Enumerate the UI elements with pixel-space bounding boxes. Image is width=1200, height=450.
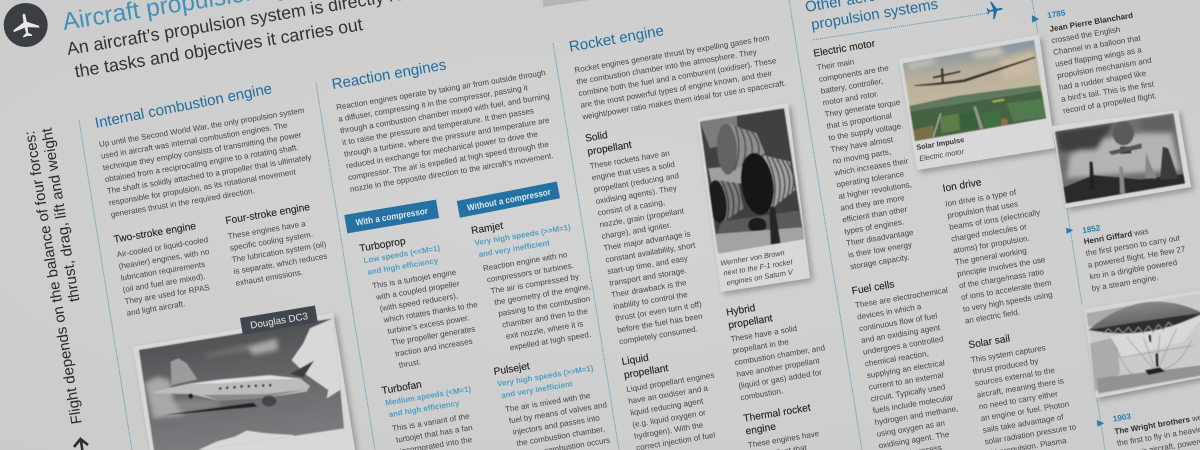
block: fuel cells: undergoes a controlled <box>862 334 944 357</box>
block: electric motor: Electric motor <box>813 38 877 60</box>
block: electric motor: that is proportional <box>826 111 893 131</box>
block: fuel cells: using oxygen as an <box>876 418 945 439</box>
caption: Solar Impulse, electric motor: Electric motor <box>918 147 965 163</box>
text: internal combustion intro: used in aircraft was internal combustion engines. The <box>100 121 289 161</box>
entry: 1785 Jean Pierre Blanchard: had a rudder shaped like <box>1058 69 1147 92</box>
subheading: four-stroke engine: Four-stroke engine <box>225 202 311 227</box>
block: turbofan: Medium speeds (<M=1) <box>385 384 472 408</box>
block: liquid propellant: liquid reducing agent <box>630 396 705 418</box>
button: without a compressor: Without a compressor <box>466 187 552 213</box>
block: turboprop: with a coupled propeller <box>374 279 460 302</box>
block: hybrid propellant: combustion. <box>740 386 784 402</box>
block: liquid propellant: have an oxidiser and a <box>628 384 709 406</box>
block: electric motor: operating tolerance <box>836 169 905 189</box>
block: hybrid propellant: These have a solid <box>730 324 798 344</box>
block: electric motor: They generate torque <box>824 98 901 119</box>
block: electric motor: Their main <box>816 57 855 72</box>
block: solid propellant: completely consumed. <box>618 324 698 346</box>
block: thermal rocket engine: engine <box>745 422 777 437</box>
block: ion drive: of the charge/mass ratio <box>958 267 1045 290</box>
icon: up arrow <box>74 439 88 450</box>
block: solar sail: solar radiation pressure to <box>984 422 1077 447</box>
vertical side text: four forces: thrust, drag, lift and weight <box>38 126 83 303</box>
text: internal combustion intro: Up until the Second World War, the only propulsion system <box>98 106 305 149</box>
text: four-stroke: is separate, which reduces <box>233 252 328 276</box>
text: two-stroke: (oil and fuel are mixed). <box>122 272 206 294</box>
block: hybrid propellant: have another propellant <box>736 356 821 379</box>
label: Douglas DC3 <box>240 305 318 335</box>
block: fuel cells: supplying an electrical <box>866 358 946 380</box>
block: solar sail: Solar sail <box>968 333 1011 351</box>
entry: 1785 Jean Pierre Blanchard: Channel in a balloon that <box>1053 33 1142 57</box>
block: ramjet: Ramjet <box>470 221 504 237</box>
block: ramjet: compressors or turbines. <box>486 261 574 284</box>
block: hybrid propellant <box>725 293 832 402</box>
block: ramjet: Very high speeds (>>M=1) <box>474 223 572 248</box>
text: rocket engine intro: combine both the fuel and a comburent (oxidiser). These <box>578 56 777 98</box>
block: liquid propellant: Liquid propellant engines <box>626 371 715 394</box>
block: solid propellant <box>584 119 710 346</box>
block: ion drive: an electric field. <box>964 307 1021 326</box>
block: hybrid propellant: combustion chamber, and <box>734 343 826 367</box>
block: solar sail: sails take advantage of <box>982 412 1065 435</box>
block: electric motor: battery, controller, <box>820 76 884 96</box>
block: ramjet <box>470 208 599 355</box>
block: ion drive: principle involves the use <box>956 255 1047 279</box>
block: ramjet: expelled at high speed. <box>509 330 592 352</box>
block: turboprop: thrust. <box>398 357 422 370</box>
block: electric motor: Their disadvantage <box>846 228 915 248</box>
block: turboprop: and high efficiency <box>367 256 439 277</box>
block: thermal rocket engine <box>743 402 822 450</box>
block: ion drive: to very high speeds using <box>962 290 1053 314</box>
block: ion drive: beams of ions (electrically <box>949 208 1041 232</box>
block: solid propellant: thrust (or even turn it off) <box>615 300 703 323</box>
text: reaction engines intro <box>336 68 560 194</box>
block: pulsejet: The air is mixed with the <box>504 391 592 414</box>
vertical side text: four forces: Flight depends on the balance of four forces: <box>21 130 86 425</box>
text: two-stroke: (heavier) engines, with no <box>118 247 210 271</box>
block: fuel cells: oxidising agent. The <box>878 430 950 450</box>
block: ramjet: the geometry of the engine, <box>494 282 591 307</box>
panel: timeline <box>1032 8 1200 450</box>
caption: Wernher von Brown: engines on Saturn V <box>726 267 794 287</box>
block: ion drive: of ions to accelerate them <box>960 278 1052 302</box>
entry: 1852 Henri Giffard: the first person to carry out <box>1085 233 1181 258</box>
text: rocket engine intro: the combustion chamber into the atmosphere. They <box>576 47 757 86</box>
block: pulsejet: the combustion chamber, <box>516 424 606 448</box>
block: pulsejet <box>493 350 613 450</box>
block: hybrid propellant: propellant in the <box>732 337 790 356</box>
text: reaction engines intro: Reaction engines operate by taking air from outside through <box>336 68 546 112</box>
block: turboprop: turbine’s excess power. <box>387 313 470 336</box>
text: reaction engines intro: nozzle in the opposite direction to the aircraft’s movement. <box>349 151 554 194</box>
heading: reaction engines: Reaction engines <box>330 56 448 93</box>
entry: 1903 Wright brothers <box>1097 411 1200 450</box>
entry: 1852 Henri Giffard: Henri Giffard was <box>1083 227 1149 246</box>
entry: 1785 Jean Pierre Blanchard: 1785 <box>1047 8 1066 20</box>
panel: reaction engines <box>330 56 613 450</box>
text: two-stroke: Air-cooled or liquid-cooled <box>116 235 209 259</box>
block: fuel cells: and an oxidising agent <box>860 323 942 345</box>
block: solid propellant: inability to control the <box>613 290 689 311</box>
block: solid propellant: Solid <box>584 130 609 145</box>
block: electric motor: They have almost <box>830 135 894 154</box>
heading: internal combustion engine: Internal combustion engine <box>93 80 273 132</box>
text: reaction engines intro: compressor. The air is expelled at high speed through the <box>347 140 550 182</box>
block: turbofan: Turbofan <box>381 379 423 397</box>
entry: 1785 Jean Pierre Blanchard: used flapping wings as a <box>1054 45 1143 69</box>
button: with a compressor: With a compressor <box>355 206 429 228</box>
text: four-stroke: The lubrication system (oil) <box>231 240 327 264</box>
text: rocket engine intro: are the most powerful types of engine known, and their <box>580 69 773 110</box>
subheading: two-stroke engine: Two-stroke engine <box>113 221 197 246</box>
block: ion drive: charged molecules or <box>950 222 1028 244</box>
block: electric motor: storage capacity. <box>849 253 910 271</box>
entry: 1785 Jean Pierre Blanchard: Jean Pierre Blanchard <box>1049 11 1134 34</box>
block: turbofan: This is a variant of the <box>391 411 471 433</box>
block: hybrid propellant: propellant <box>728 313 774 331</box>
block: electric motor: motor and rotor. <box>822 89 879 107</box>
text: two-stroke: and light aircraft. <box>126 299 186 318</box>
block: ramjet: The air is compressed by <box>490 272 580 296</box>
entry: 1852 Henri Giffard <box>1066 221 1190 293</box>
icon: blue plane <box>985 0 1004 20</box>
block: solar sail: thrust produced by <box>972 356 1039 376</box>
block: fuel cells: fuels include molecular <box>872 393 954 415</box>
label: Douglas DC3: Douglas DC3 <box>250 311 309 332</box>
block: ion drive: The general working <box>954 246 1027 267</box>
block: ramjet: Reaction engine with no <box>482 250 569 273</box>
block: solid propellant: propellant <box>587 140 633 158</box>
text: two-stroke: lubrication requirements <box>120 260 206 283</box>
text: reaction engines intro: reduced in exchange for mechanical power to drive the <box>345 129 539 171</box>
text: reaction engines intro: through a combustion chamber mixed with fuel, and burning <box>339 91 550 135</box>
button: without a compressor <box>457 182 560 218</box>
block: fuel cells: continuous flow of fuel <box>858 311 938 333</box>
text: reaction engines intro: a diffuser, compressing it in the compressor, passing it <box>338 83 529 124</box>
block: pulsejet: fuel by means of valves and <box>508 400 608 425</box>
text: rocket engine intro <box>573 32 787 122</box>
block: solar sail: an engine or fuel. Photon <box>980 399 1070 423</box>
block: pulsejet: Pulsejet <box>493 361 531 378</box>
subtitle: the tasks and objectives it carries out <box>73 14 364 81</box>
block: turbofan: turbojet that has a fan <box>395 423 473 445</box>
button: with a compressor <box>344 200 439 233</box>
photo card: Douglas DC3 <box>120 300 360 450</box>
icon: plane in dark circle <box>4 3 48 47</box>
entry: 1852 Henri Giffard: 1852 <box>1082 223 1101 235</box>
entry: 1852 Henri Giffard: km in a dirigible powered <box>1089 258 1178 281</box>
block: ion drive: atoms) for propulsion. <box>952 234 1030 255</box>
block: thermal rocket engine: Thermal rocket <box>743 403 812 425</box>
block: fuel cells <box>851 271 974 450</box>
block: electric motor: at higher revolutions, <box>838 180 912 201</box>
block: pulsejet: injectors and passes into <box>512 413 601 437</box>
photo card: F-1 rocket engines <box>693 103 810 292</box>
block: electric motor: is their low energy <box>847 240 913 260</box>
text: internal combustion intro: The shaft is solidly attached to a propeller that is ultimately <box>106 153 312 196</box>
block: solid propellant: start-up time, and easy <box>607 254 688 276</box>
block: liquid propellant: propellant <box>623 363 669 381</box>
block: ion drive: Ion drive is a type of <box>945 188 1017 208</box>
block: ion drive: Ion drive <box>942 177 983 195</box>
block: ramjet: chamber and then to the <box>501 306 589 330</box>
block: liquid propellant: (e.g. liquid oxygen or <box>632 408 707 429</box>
caption: Solar Impulse, electric motor <box>916 135 967 163</box>
block: turboprop: This is a turbojet engine <box>372 268 457 291</box>
block: solid propellant: before the fuel has been <box>617 312 703 335</box>
block: ion drive <box>942 169 1056 326</box>
block: solid propellant: These rockets have an <box>589 149 670 171</box>
block: solid propellant: propellant (reducing and <box>593 171 680 194</box>
text: reaction engines intro: through a turbine, where the pressure and temperature are <box>343 115 551 159</box>
block: solid propellant: transport and storage. <box>609 266 687 288</box>
caption: Wernher von Brown: next to the F-1 rocket <box>723 257 794 278</box>
caption: Wernher von Brown: Wernher von Brown <box>720 248 785 268</box>
text: internal combustion intro: generates thrust in the required direction. <box>110 186 255 219</box>
block: electric motor: types of engines. <box>844 217 905 236</box>
heading: rocket engine: Rocket engine <box>568 22 665 56</box>
block: electric motor: efficient than other <box>842 205 908 225</box>
text: internal combustion intro: technique they employ consists of transmitting the power <box>102 130 302 172</box>
block: turbofan: and high efficiency <box>388 398 461 419</box>
block: solar sail <box>968 325 1079 450</box>
text: rocket engine intro: Rocket engines generate thrust by expelling gases from <box>574 33 770 75</box>
block: hybrid propellant: Hybrid <box>725 303 757 319</box>
entry: 1852 Henri Giffard: a powered flight. He flew 27 <box>1087 244 1186 270</box>
panel: other aeronautical propulsion systems <box>804 0 1079 450</box>
block: liquid propellant: Liquid <box>621 353 650 368</box>
text: internal combustion intro <box>98 106 317 219</box>
block: electric motor: and they are more <box>840 193 906 213</box>
block: electric motor <box>813 36 927 272</box>
block: turboprop: Turboprop <box>359 236 407 255</box>
caption: Solar Impulse, electric motor: Solar Impulse <box>916 135 965 152</box>
block: turboprop: Low speeds (<<M=1) <box>363 243 441 265</box>
text: four-stroke: specific cooling system. <box>229 230 313 253</box>
panel: internal combustion engine <box>93 80 360 450</box>
block: ramjet: exit nozzle, where it is <box>505 319 584 341</box>
block: ion drive: propulsion that uses <box>947 199 1019 220</box>
block: solid propellant: Their major advantage is <box>603 229 691 253</box>
block: pulsejet: Very high speeds (>>M=1) <box>497 364 594 389</box>
block: thermal rocket engine: These engines have <box>747 429 820 450</box>
block: electric motor: which increases their <box>833 156 909 178</box>
block: solid propellant: Their drawback is the <box>611 278 688 300</box>
photo card: airship engraving <box>1084 288 1200 398</box>
text: internal combustion intro: obtained from a reciprocating engine to a rotating shaft. <box>104 143 299 184</box>
text: internal combustion intro: responsible for propulsion, as its rotational movement <box>108 167 297 208</box>
block: liquid propellant <box>621 342 727 450</box>
entry: 1903 Wright brothers: 1903 <box>1112 412 1132 424</box>
photo card: balloon engraving <box>1050 110 1191 208</box>
block: solid propellant: constant availability, short <box>605 240 697 264</box>
block: fuel cells: These are electrochemical <box>854 286 949 310</box>
block: fuel cells: Fuel cells <box>851 279 895 297</box>
text: two-stroke <box>116 235 219 318</box>
block: turboprop: (with speed reducers), <box>379 291 459 313</box>
block: fuel cells: circuit. Typically used <box>870 382 946 404</box>
block: fuel cells: current to an external <box>868 370 944 392</box>
block: electric motor: no moving parts, <box>832 147 892 166</box>
text: rocket engine intro: weight/power ratio makes them ideal for use in spacecraft. <box>581 79 787 122</box>
block: solar sail: aircraft, meaning there is <box>976 376 1064 400</box>
block: turboprop: which rotates thanks to the <box>382 300 479 325</box>
block: turboprop <box>359 226 487 373</box>
block: solar sail: no need to carry either <box>978 389 1059 411</box>
entry: 1785 Jean Pierre Blanchard: propulsion mechanism and <box>1056 56 1152 80</box>
block: ramjet: and very inefficient <box>478 238 551 259</box>
block: solid propellant: oxidising agents). They <box>595 183 677 206</box>
entry: 1785 Jean Pierre Blanchard <box>1032 8 1158 116</box>
block: electric motor: to the supply voltage. <box>828 121 904 143</box>
text: four-stroke: exhaust emissions. <box>235 268 304 288</box>
block: pulsejet: and very inefficient <box>501 379 573 400</box>
block: hybrid propellant: (liquid or gas) added for <box>738 368 823 391</box>
block: solid propellant: charge), and igniter. <box>601 220 672 241</box>
block: fuel cells: chemical reaction, <box>864 349 929 368</box>
block: solid propellant: consist of a casing, <box>597 198 666 218</box>
panel: rocket engine <box>568 22 832 450</box>
block: turboprop: traction and increases <box>394 337 473 359</box>
block: turbofan <box>381 371 480 450</box>
block: liquid propellant: hydrogen). With the <box>634 420 704 441</box>
text: reaction engines intro: it to raise the pressure and temperature. It then passes <box>341 106 535 147</box>
entry: 1785 Jean Pierre Blanchard: crossed the English <box>1051 25 1121 45</box>
block: fuel cells: hydrogen and methane, <box>874 404 959 427</box>
block: solid propellant: engine that uses a solid <box>591 160 675 183</box>
caption: Wernher von Brown <box>720 247 796 288</box>
entry: 1785 Jean Pierre Blanchard: record of a propelled flight. <box>1062 91 1157 116</box>
entry: 1785 Jean Pierre Blanchard: a bird’s tail. This is the first <box>1060 79 1155 104</box>
text: four-stroke: These engines have a <box>227 219 307 241</box>
text: four-stroke <box>227 216 331 288</box>
block: turboprop: The propeller generates <box>391 324 476 347</box>
entry: 1852 Henri Giffard: by a steam engine. <box>1091 273 1159 293</box>
block: ramjet: passing to the combustion <box>498 294 591 318</box>
block: fuel cells: devices in which a <box>856 302 922 322</box>
photo card: Solar Impulse <box>890 30 1057 170</box>
block: solar sail: sources external to the <box>974 366 1056 388</box>
block: solar sail: This system captures <box>970 343 1046 365</box>
text: two-stroke: They are used for RPAS <box>124 283 210 306</box>
block: electric motor: components are the <box>818 63 890 84</box>
block: solid propellant: nozzle, grain (propellant <box>599 206 685 229</box>
